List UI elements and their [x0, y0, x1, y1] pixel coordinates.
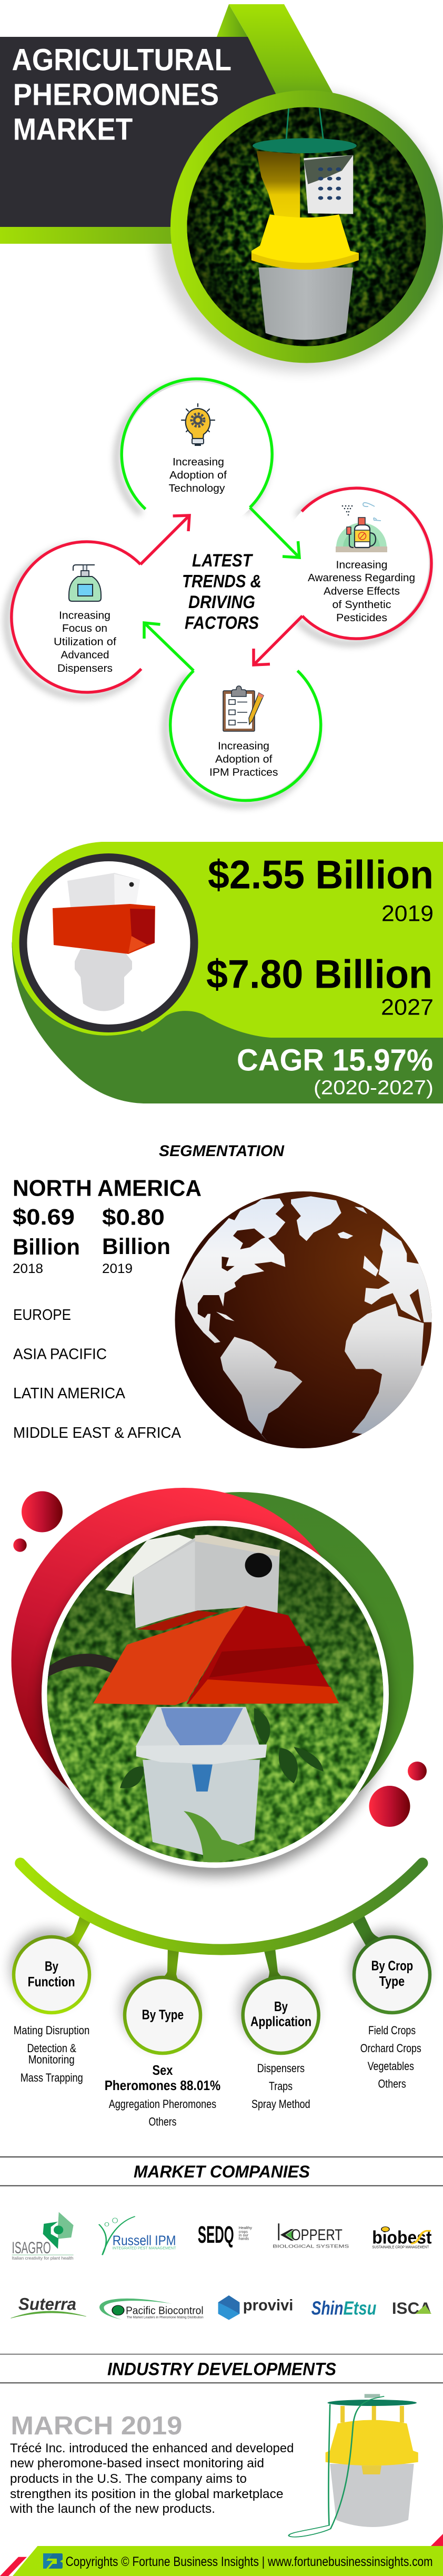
- title: AGRICULTURAL: [12, 43, 231, 77]
- lobe: dispensers: [7, 542, 162, 697]
- heading: latest trends: [182, 551, 261, 633]
- by function: Function: [28, 1974, 75, 1990]
- logo: isagro: Italian creativity for plant health: [12, 2256, 74, 2261]
- stems: [66, 1911, 381, 1985]
- heading: segmentation: SEGMENTATION: [159, 1142, 285, 1160]
- segment tree: [11, 1863, 430, 2129]
- logo: sedq: crops: [239, 2230, 248, 2234]
- iceland: [338, 1231, 353, 1239]
- heading: industry developments: INDUSTRY DEVELOPMENTS: [107, 2360, 336, 2380]
- CAGR: (2020-2027): [314, 1077, 434, 1099]
- icon: sprayer: [336, 503, 387, 552]
- great lakes: [222, 1257, 235, 1271]
- lobe: synthetic pesticides: [280, 488, 431, 643]
- logo: shin-etsu: Etsu: [343, 2298, 376, 2319]
- label: IPM practices: Increasing: [218, 740, 269, 752]
- label: IPM practices: IPM Practices: [209, 767, 278, 778]
- arrow: IPM to dispensers: [144, 623, 194, 671]
- list: function: Mass Trapping: [21, 2071, 83, 2084]
- market value 2027: 2027: [381, 995, 434, 1020]
- heading: latest trends: DRIVING: [188, 592, 255, 612]
- panel: latest trends and driving factors: [7, 379, 431, 805]
- lime bar: [0, 227, 179, 244]
- by function: [14, 1937, 89, 2013]
- by crop type: By Crop: [371, 1958, 413, 1974]
- regional figures: Billion: [102, 1234, 170, 1259]
- logo: koppert: OPPERT: [291, 2226, 343, 2244]
- label: technology: Increasing: [173, 456, 224, 468]
- red roof face: [93, 1606, 246, 1705]
- list: application: [251, 2062, 310, 2111]
- list: function: Mating Disruption: [14, 2024, 89, 2037]
- lime background: [12, 842, 443, 1040]
- market value 2019: 2019: [381, 901, 434, 927]
- heading: latest trends: FACTORS: [185, 613, 259, 633]
- logo: isagro: ISAGRO: [12, 2239, 51, 2257]
- list: crop type: Vegetables: [368, 2060, 414, 2073]
- development text: strengthen its position in the global marketplace: [10, 2487, 284, 2501]
- green lid: [253, 138, 357, 153]
- green crescent: [66, 1492, 414, 1839]
- dark green wave: [12, 942, 443, 1103]
- label: dispensers: Dispensers: [57, 663, 113, 674]
- arc: [21, 1863, 422, 1950]
- label: dispensers: Focus on: [62, 623, 107, 634]
- hanging cords: [285, 107, 324, 139]
- south america: [220, 1337, 303, 1443]
- dark title panel: [0, 37, 280, 227]
- icon: clipboard with pencil: [223, 686, 264, 731]
- label: synthetic pesticides: Awareness Regarding: [308, 572, 415, 584]
- logo: sedq: [198, 2221, 252, 2248]
- by crop type: [354, 1937, 430, 2013]
- heading: market companies: MARKET COMPANIES: [134, 2162, 310, 2181]
- arrow: pesticides to IPM: [254, 616, 303, 665]
- region list: [13, 1307, 182, 1441]
- CAGR: [237, 1043, 434, 1099]
- globe: [175, 1191, 432, 1448]
- title: MARKET: [13, 113, 133, 147]
- logo: sedq: Healthy: [239, 2226, 252, 2230]
- trap image: [53, 873, 155, 1011]
- logo: pacific biocontrol: [99, 2299, 204, 2320]
- regional figures: [13, 1175, 202, 1276]
- label: technology: [168, 456, 227, 494]
- lower shadow: [41, 1527, 390, 1876]
- white box: [133, 1538, 280, 1628]
- title: PHEROMONES: [13, 78, 219, 112]
- market value 2027: $7.80 Billion: [206, 952, 432, 997]
- regional figures: $0.80: [102, 1205, 165, 1230]
- region list: MIDDLE EAST & AFRICA: [13, 1425, 182, 1441]
- logo: pacific biocontrol: The Market Leaders in Pheromone Mating Distribution: [127, 2315, 204, 2319]
- label: dispensers: Utilization of: [54, 636, 116, 648]
- ball shadows: [11, 1929, 428, 2047]
- label: technology: Technology: [168, 483, 225, 494]
- dark leaves: [120, 1708, 324, 1788]
- icon: fortune business insights logo: [43, 2553, 63, 2569]
- list: application: Traps: [269, 2080, 293, 2093]
- europe and asia: [365, 1229, 432, 1322]
- development text: [9, 2441, 294, 2516]
- trap photo: [184, 105, 429, 347]
- list: application: Dispensers: [257, 2062, 305, 2075]
- logo: shin-etsu: Shin: [311, 2298, 343, 2319]
- blue funnel: [161, 1708, 243, 1746]
- regional figures: NORTH AMERICA: [13, 1175, 202, 1201]
- ring shadow: [155, 89, 443, 372]
- icon: dispenser bottle: [69, 565, 101, 601]
- panel: trap illustration: [12, 1488, 427, 1876]
- logo: koppert: [273, 2223, 349, 2249]
- logo: russell ipm: INTEGRATED PEST MANAGEMENT: [113, 2246, 176, 2251]
- arrow: dispensers to technology: [140, 515, 189, 564]
- north america: [182, 1198, 285, 1343]
- regional figures: $0.69: [13, 1205, 75, 1230]
- logo: isagro: [12, 2212, 74, 2261]
- list: function: [14, 2024, 89, 2084]
- market value 2027: [206, 952, 434, 1020]
- logo: russell ipm: Russell IPM: [113, 2233, 176, 2248]
- CAGR: CAGR 15.97%: [237, 1043, 433, 1078]
- by type: By Type: [142, 2007, 184, 2023]
- by function: By: [45, 1958, 58, 1974]
- cup top: [136, 1707, 260, 1747]
- label: synthetic pesticides: Increasing: [336, 559, 387, 571]
- lobe: technology: [117, 379, 272, 531]
- list: type: Sex: [153, 2062, 173, 2078]
- label: technology: Adoption of: [169, 470, 227, 481]
- branch: [47, 1654, 119, 1677]
- red dots: [13, 1491, 427, 1827]
- list: function: Monitoring: [28, 2053, 75, 2066]
- label: synthetic pesticides: of Synthetic: [333, 599, 391, 611]
- list: function: Detection &: [27, 2042, 76, 2055]
- label: dispensers: Increasing: [59, 610, 110, 621]
- blue tube: [192, 1765, 213, 1792]
- development text: Trécé Inc. introduced the enhanced and developed: [10, 2441, 294, 2455]
- region list: ASIA PACIFIC: [13, 1346, 107, 1362]
- green ring: [170, 91, 443, 363]
- green ribbon: [229, 4, 337, 100]
- regional figures: Billion: [13, 1235, 80, 1260]
- lobe: IPM practices: [166, 650, 321, 805]
- trap photo: [45, 1524, 387, 1866]
- region list: EUROPE: [13, 1307, 71, 1324]
- heading: latest trends: LATEST: [192, 551, 254, 571]
- africa: [345, 1304, 432, 1435]
- arrow: technology to pesticides: [250, 508, 299, 558]
- development text: with the launch of the new products.: [9, 2502, 215, 2516]
- label: IPM practices: [209, 740, 278, 778]
- region list: LATIN AMERICA: [13, 1385, 126, 1402]
- market value 2019: $2.55 Billion: [208, 853, 434, 898]
- list: application: Spray Method: [251, 2097, 310, 2111]
- logo: provivi: provivi: [243, 2296, 293, 2314]
- logo: sedq: SEDQ: [198, 2221, 234, 2248]
- by crop type: Type: [379, 1973, 405, 1989]
- regional figures: 2018: [13, 1261, 43, 1276]
- logo: sedq: in our: [239, 2233, 249, 2237]
- label: dispensers: [54, 610, 116, 674]
- trap product image: [289, 2394, 418, 2537]
- list: crop type: [360, 2024, 421, 2091]
- greenland: [291, 1196, 341, 1241]
- logo: suterra: Suterra: [18, 2294, 76, 2314]
- icon: light bulb with gear: [182, 404, 215, 446]
- label: IPM practices: Adoption of: [215, 754, 273, 765]
- leaf: [184, 1811, 260, 1863]
- logo: koppert: BIOLOGICAL SYSTEMS: [273, 2244, 349, 2249]
- logo: russell ipm: [99, 2216, 176, 2255]
- dark ring: [19, 853, 198, 1032]
- logo: sedq: hands: [239, 2237, 249, 2241]
- header banner: [0, 4, 443, 372]
- development text: new pheromone-based insect monitoring aid: [10, 2456, 264, 2471]
- list: crop type: Field Crops: [368, 2024, 416, 2037]
- label: synthetic pesticides: Adverse Effects: [324, 585, 400, 597]
- company logos: [11, 2212, 432, 2320]
- by application: By: [274, 1998, 288, 2014]
- red roof inner: [186, 1606, 339, 1704]
- label: synthetic pesticides: Pesticides: [336, 612, 387, 624]
- heading: latest trends: TRENDS &: [182, 572, 261, 592]
- title: [12, 43, 231, 147]
- upper flap: [137, 1610, 219, 1630]
- caribbean: [216, 1312, 235, 1321]
- list: type: Others: [148, 2115, 177, 2129]
- uk: [363, 1256, 379, 1276]
- clear cup: [258, 267, 353, 340]
- red crescent: [12, 1488, 356, 1833]
- yellow bowl: [251, 214, 359, 270]
- logo: provivi: [218, 2295, 293, 2320]
- by type: [125, 1977, 200, 2053]
- perforated card: [304, 155, 353, 214]
- regional figures: 2019: [102, 1261, 133, 1276]
- label: dispensers: Advanced: [61, 650, 109, 661]
- logo: pacific biocontrol: Pacific Biocontrol: [126, 2304, 204, 2316]
- list: type: Aggregation Pheromones: [109, 2097, 216, 2111]
- panel: market size: [12, 842, 443, 1103]
- by application: [243, 1977, 319, 2053]
- list: type: [105, 2062, 220, 2129]
- funnel: [257, 151, 300, 218]
- spitsbergen: [355, 1207, 367, 1214]
- ribbon fold: [217, 4, 248, 37]
- lip: [136, 1745, 267, 1764]
- white frame: [42, 1520, 389, 1868]
- label: synthetic pesticides: [308, 559, 415, 624]
- list: type: Pheromones 88.01%: [105, 2077, 220, 2093]
- market value 2019: [208, 853, 434, 927]
- list: crop type: Others: [378, 2077, 406, 2091]
- logo: suterra: [11, 2294, 86, 2318]
- lower cup: [143, 1760, 260, 1855]
- by application: Application: [250, 2013, 311, 2029]
- development text: products in the U.S. The company aims to: [10, 2472, 247, 2486]
- development date: MARCH 2019: [11, 2412, 182, 2440]
- list: crop type: Orchard Crops: [360, 2042, 421, 2055]
- footer band: [0, 2534, 443, 2576]
